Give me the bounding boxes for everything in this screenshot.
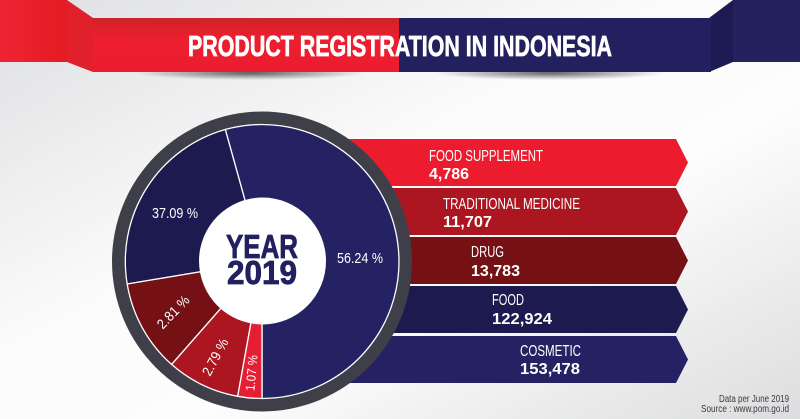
ribbon shadow: right — [435, 66, 665, 80]
ribbon right fold — [709, 0, 733, 72]
source note — [701, 394, 789, 415]
percent: cosmetic: 56.24 % — [337, 250, 383, 267]
bar: traditional medicine: 11,707 — [443, 214, 492, 231]
centre label: 2019: 2019 — [227, 254, 297, 291]
bar: traditional medicine: TRADITIONAL MEDICINE — [443, 196, 580, 213]
header ribbon — [0, 0, 800, 80]
data bars — [340, 139, 688, 383]
ribbon right wing — [733, 0, 800, 62]
ribbon left wing — [0, 0, 67, 62]
bar: food supplement: FOOD SUPPLEMENT — [429, 148, 543, 165]
bar: cosmetic — [340, 336, 688, 383]
centre label: year: YEAR — [226, 228, 298, 265]
slice: drug 2.81% — [127, 262, 262, 364]
slice: traditional medicine 2.79% — [172, 262, 262, 396]
bar: food — [340, 286, 688, 333]
ribbon shadow: left — [135, 66, 365, 80]
bar: drug — [340, 237, 688, 284]
bar: drug: 13,783 — [471, 263, 520, 280]
donut centre — [199, 198, 326, 324]
bar: food supplement: 4,786 — [429, 166, 469, 183]
percent: drug: 2.81 % — [153, 292, 193, 332]
bar: food supplement — [340, 139, 688, 186]
percent: food supplement: 1.07 % — [242, 354, 261, 392]
slice: food supplement 1.07% — [238, 262, 262, 398]
bar: cosmetic: 153,478 — [520, 361, 580, 378]
percent: food: 37.09 % — [152, 205, 198, 222]
ribbon red half — [93, 18, 399, 72]
bar: drug: DRUG — [471, 244, 504, 261]
donut outer ring — [112, 112, 412, 412]
bar: food: 122,924 — [492, 311, 552, 328]
bar: traditional medicine — [340, 188, 688, 235]
title: PRODUCT REGISTRATION IN INDONESIA — [188, 31, 612, 63]
ribbon left fold — [67, 0, 93, 72]
bar: food: FOOD — [492, 292, 524, 309]
slice: food 37.09% — [125, 130, 262, 284]
bar: cosmetic: COSMETIC — [520, 343, 581, 360]
percent: traditional medicine: 2.79 % — [199, 336, 231, 378]
ribbon navy half — [399, 18, 711, 72]
donut chart — [112, 112, 412, 412]
slice: cosmetic 56.24% — [225, 125, 399, 398]
